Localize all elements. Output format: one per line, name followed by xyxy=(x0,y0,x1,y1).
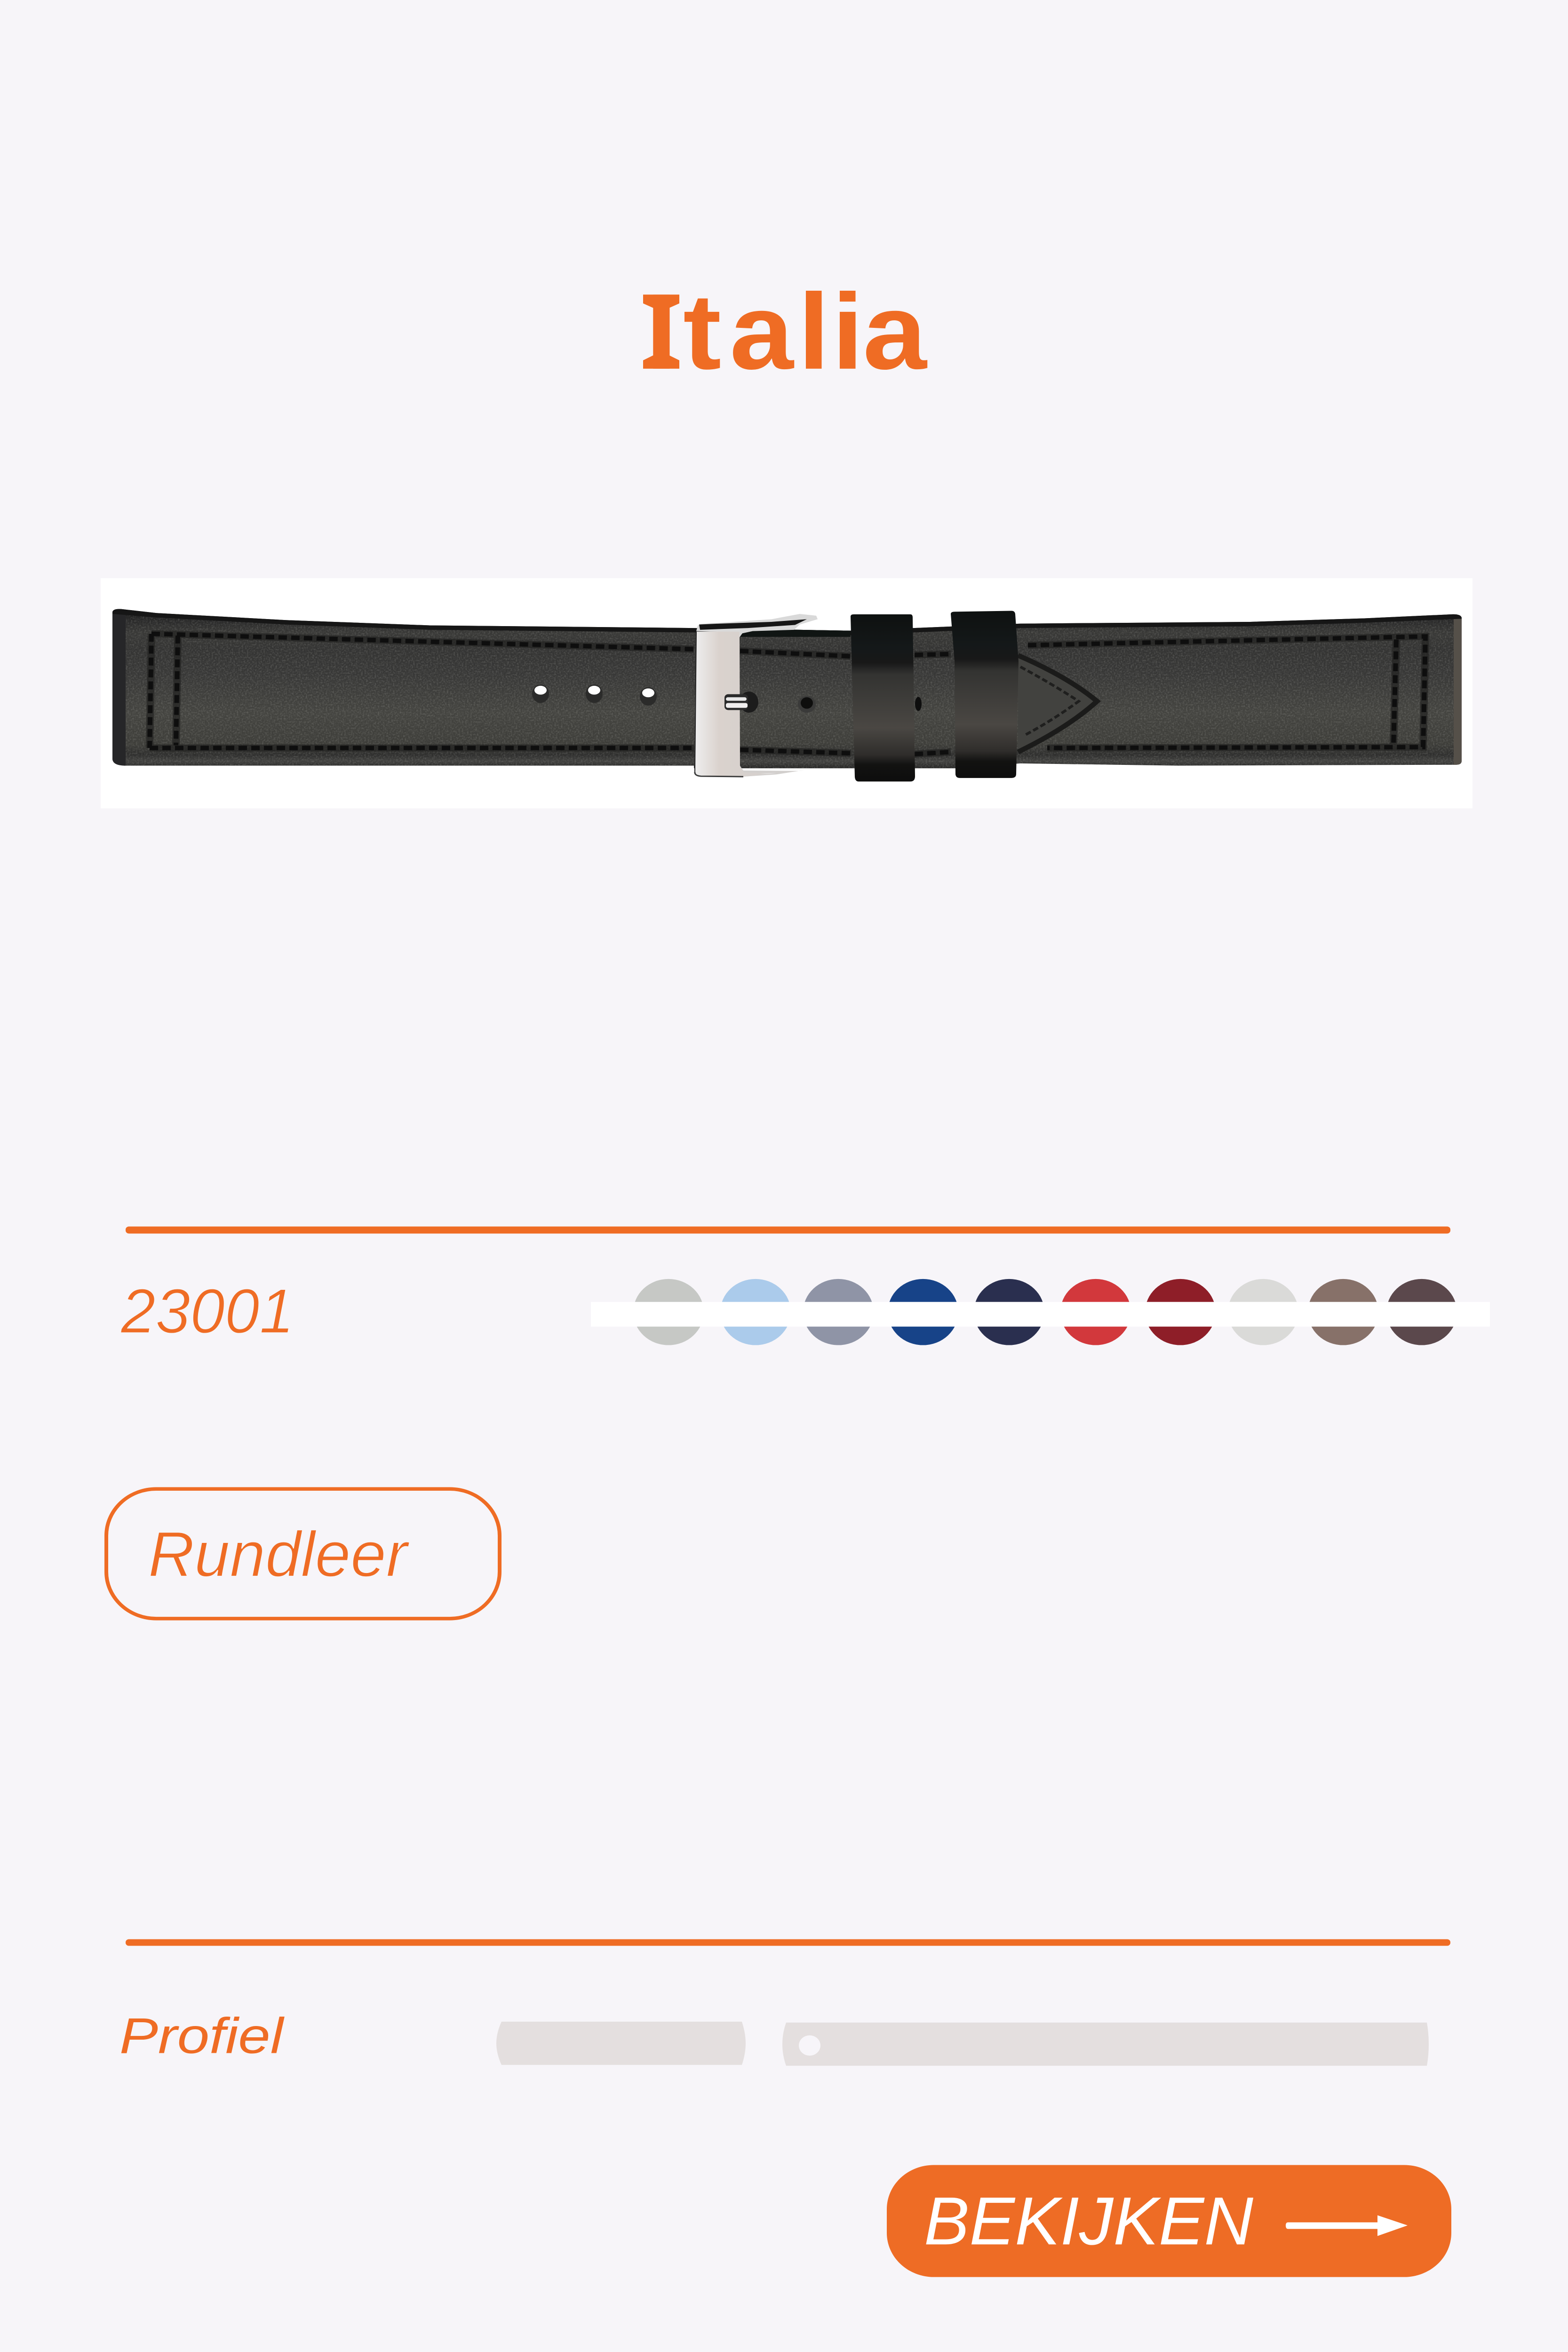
icon: arrow xyxy=(1286,2215,1408,2236)
profile label: Profiel xyxy=(119,2008,285,2064)
leather strap body xyxy=(108,606,1468,772)
buckle xyxy=(695,614,818,777)
title: Italia xyxy=(645,272,928,392)
divider: top rule xyxy=(126,1226,1450,1233)
strap tongue xyxy=(1018,655,1097,752)
divider: bottom rule xyxy=(126,1939,1450,1946)
stitching xyxy=(150,634,1425,754)
material tag: Rundleer xyxy=(148,1518,410,1590)
profile diagram: short piece xyxy=(496,2022,746,2065)
button: bekijken xyxy=(887,2165,1451,2277)
profile diagram: long piece xyxy=(782,2023,1429,2066)
keeper loop 2 xyxy=(951,611,1019,778)
strap holes xyxy=(532,684,922,713)
keeper loop 1 xyxy=(851,614,915,781)
white photo panel xyxy=(101,578,1472,809)
article number: 23001 xyxy=(120,1276,294,1346)
button: bekijken: BEKIJKEN xyxy=(924,2183,1253,2259)
material tag xyxy=(106,1489,500,1619)
colour swatches xyxy=(591,1279,1490,1345)
buckle pin xyxy=(724,691,758,713)
product photo: watch strap xyxy=(101,578,1472,809)
